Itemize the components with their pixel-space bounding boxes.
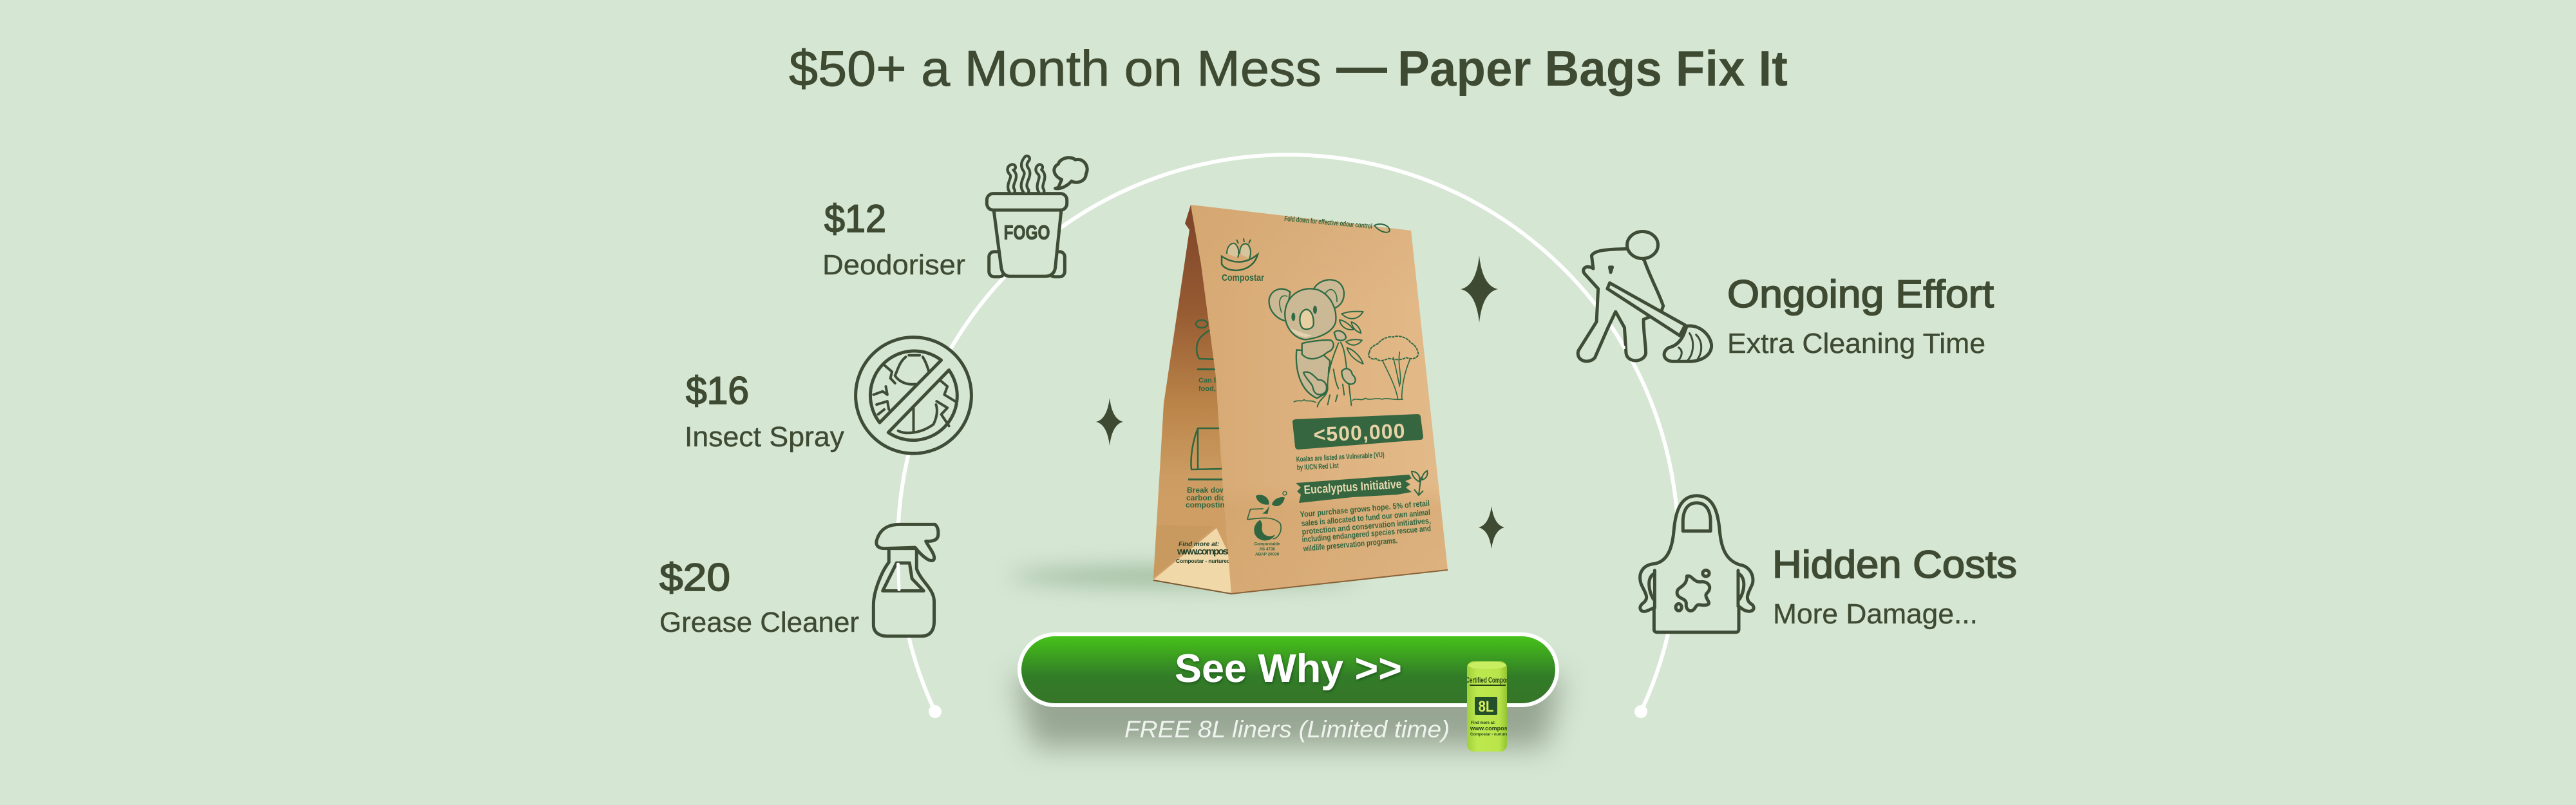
liner roll: 8L bbox=[1479, 698, 1494, 715]
button drop shadow bbox=[1014, 676, 1562, 747]
label: $16 insect spray bbox=[685, 369, 844, 453]
sparkle: left bbox=[1096, 398, 1123, 446]
liner roll: Certified Compost bbox=[1466, 676, 1511, 685]
population box bbox=[1293, 414, 1423, 450]
side print: can be text: food, l bbox=[1198, 385, 1220, 393]
bag front face bbox=[1191, 205, 1448, 594]
label: $16 insect spray: $16 bbox=[686, 369, 749, 412]
liner roll: Compostar - nurtured by bbox=[1470, 733, 1516, 737]
label: ongoing effort bbox=[1727, 272, 1994, 359]
title: Paper Bags Fix It bbox=[1397, 40, 1788, 97]
compostable certification logo: Compostable bbox=[1255, 542, 1280, 547]
free liners note: FREE 8L liners (Limited time) bbox=[1124, 716, 1450, 743]
koala arm bbox=[1302, 340, 1334, 359]
sparkle: large bbox=[1461, 256, 1498, 323]
label: $12 deodoriser: $12 bbox=[824, 197, 886, 240]
fold-down instruction: Fold down for effective odour control bbox=[1284, 215, 1372, 231]
koala body bbox=[1296, 350, 1330, 398]
side print: break down text bbox=[1186, 486, 1236, 509]
koala right ear bbox=[1313, 279, 1344, 308]
koala status note: Koalas are listed as Vulnerable (VU) bbox=[1296, 451, 1385, 464]
side print: break down text: carbon dioxi bbox=[1186, 493, 1232, 502]
liner roll bbox=[1467, 661, 1507, 752]
purchase paragraph: wildlife preservation programs. bbox=[1302, 536, 1398, 553]
gusset print: website: Compostar - nurtured bbox=[1176, 558, 1230, 564]
label: $20 grease cleaner: Grease Cleaner bbox=[659, 607, 859, 638]
gusset print: website: Find more at: bbox=[1179, 541, 1219, 548]
koala eyes bbox=[1291, 313, 1295, 321]
grass bbox=[1294, 398, 1403, 402]
koala status note: by IUCN Red List bbox=[1297, 462, 1339, 472]
white arc with end dots bbox=[898, 155, 1678, 718]
label: hidden costs bbox=[1772, 543, 2017, 630]
gusset print: website bbox=[1176, 541, 1230, 564]
koala status note bbox=[1296, 451, 1385, 472]
icon: sprout bbox=[1412, 471, 1428, 495]
button: see why bbox=[1018, 632, 1559, 707]
eucalyptus tree bbox=[1368, 336, 1418, 399]
label: ongoing effort: Extra Cleaning Time bbox=[1727, 328, 1985, 359]
icon: no insects bbox=[856, 337, 971, 453]
label: ongoing effort: Ongoing Effort bbox=[1727, 272, 1994, 316]
side print: break down text: Break down bbox=[1187, 486, 1231, 495]
compostable certification logo: ABAP 20030 bbox=[1255, 553, 1280, 557]
koala nose bbox=[1300, 310, 1314, 329]
population box: <500,000 bbox=[1313, 419, 1405, 446]
side print: rule one bbox=[1197, 368, 1215, 370]
Compostar logo bbox=[1222, 238, 1264, 283]
button: see why: See Why >> bbox=[1175, 647, 1402, 691]
sparkle: right bbox=[1479, 506, 1504, 549]
koala head bbox=[1285, 289, 1336, 339]
side print: can be text bbox=[1198, 377, 1220, 393]
koala left ear bbox=[1269, 289, 1290, 321]
side print: can be text: Can b bbox=[1198, 377, 1218, 384]
title bbox=[789, 40, 1788, 97]
purchase paragraph: Your purchase grows hope. 5% of retail bbox=[1300, 498, 1430, 519]
label: hidden costs: Hidden Costs bbox=[1772, 543, 2017, 586]
tree trunk bbox=[1318, 343, 1351, 407]
compostable certification logo: AS 4736 bbox=[1259, 547, 1275, 552]
side print: fruit icon bbox=[1196, 320, 1217, 359]
purchase paragraph: protection and conservation initiatives, bbox=[1302, 516, 1431, 536]
product: kraft paper bag bbox=[1153, 205, 1448, 594]
bag side gusset bbox=[1153, 205, 1236, 594]
side print: rule two bbox=[1188, 478, 1227, 480]
label: $12 deodoriser: Deodoriser bbox=[822, 249, 965, 281]
liner roll: www.compostar.c bbox=[1470, 725, 1519, 732]
purchase paragraph: sales is allocated to fund our own animal bbox=[1301, 508, 1430, 528]
icon: odour bin bbox=[987, 158, 1087, 277]
eucalyptus initiative banner: Eucalyptus Initiative bbox=[1303, 478, 1402, 497]
side print: break down text: composting c bbox=[1186, 500, 1236, 509]
eucalyptus leaves bbox=[1340, 312, 1363, 364]
purchase paragraph bbox=[1300, 498, 1431, 553]
liner roll: Find more at: bbox=[1471, 721, 1495, 725]
label: hidden costs: More Damage... bbox=[1773, 598, 1978, 630]
koala and tree illustration bbox=[1269, 279, 1418, 407]
label: $20 grease cleaner: $20 bbox=[659, 556, 730, 599]
label: $16 insect spray: Insect Spray bbox=[685, 421, 844, 453]
title: $50+ a Month on Mess bbox=[789, 40, 1321, 97]
icon: spray bottle bbox=[873, 524, 938, 636]
label: $20 grease cleaner bbox=[659, 556, 859, 638]
compostable certification logo bbox=[1247, 491, 1287, 557]
side print: pack icon bbox=[1191, 428, 1222, 469]
label: $12 deodoriser bbox=[822, 197, 965, 281]
eucalyptus initiative banner bbox=[1296, 475, 1412, 503]
purchase paragraph: including endangered species rescue and bbox=[1302, 524, 1431, 544]
icon: odour bin: FOGO bbox=[1004, 222, 1050, 244]
Compostar logo: Compostar bbox=[1222, 272, 1264, 283]
icon: stained apron bbox=[1640, 496, 1754, 632]
icon: person mopping bbox=[1578, 231, 1712, 361]
bag ground shadow bbox=[1011, 566, 1359, 587]
gusset print: website: www.compost bbox=[1177, 546, 1230, 557]
